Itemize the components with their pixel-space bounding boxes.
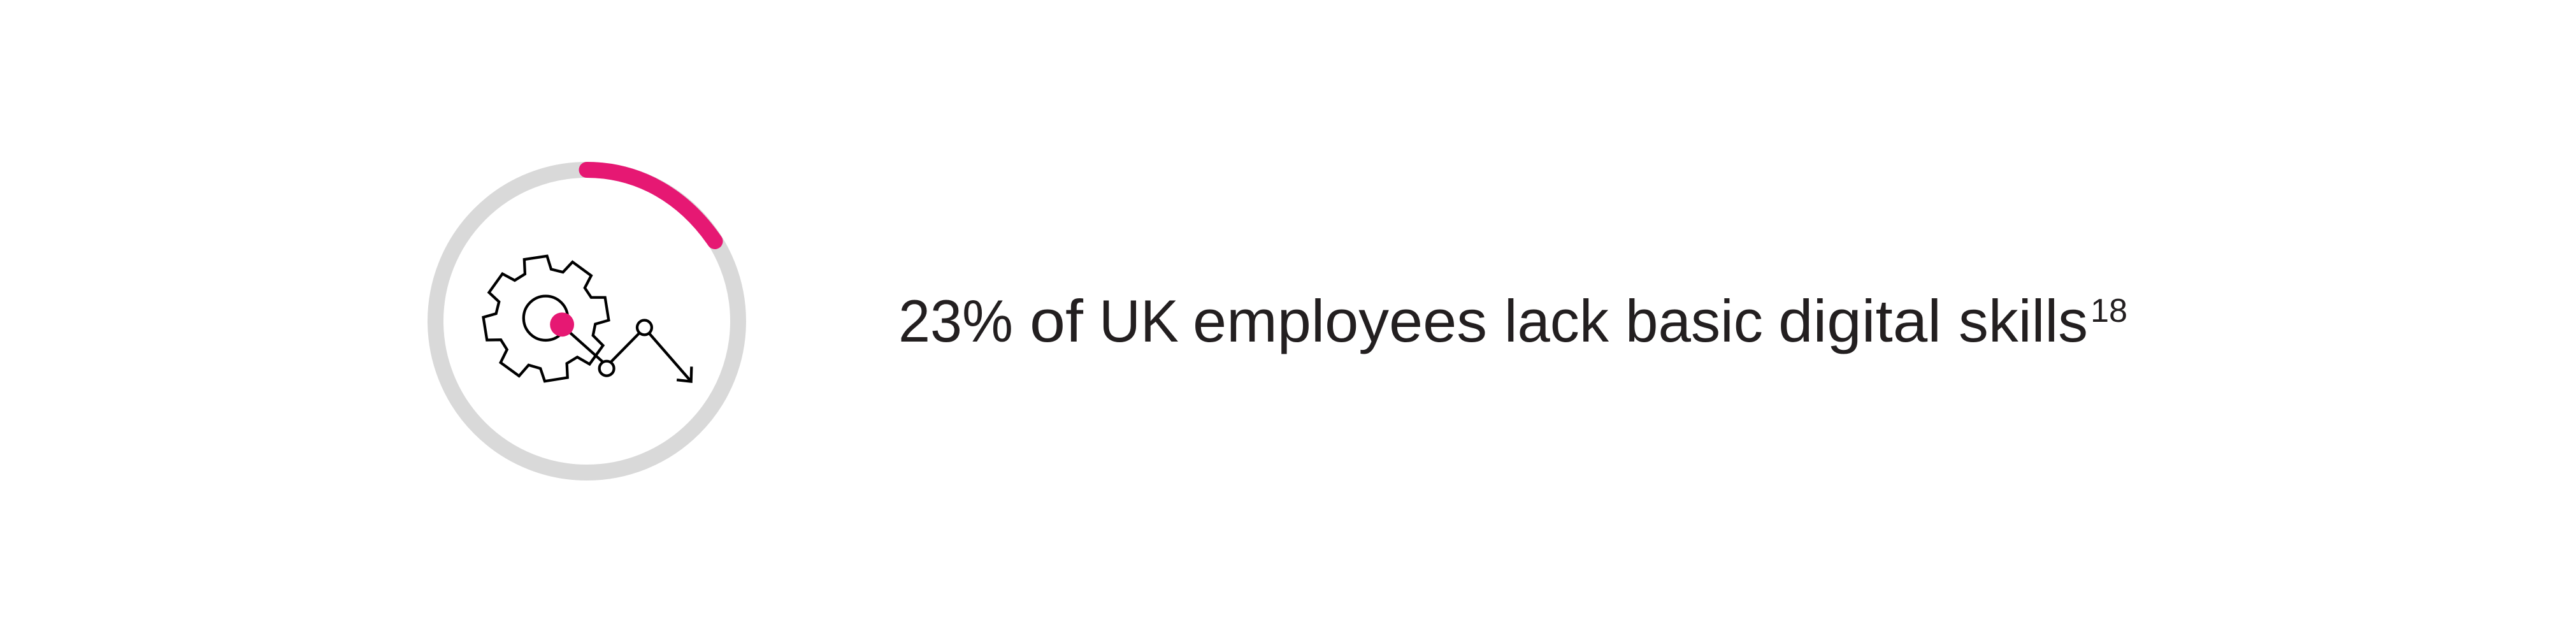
chart node 2 [637, 320, 652, 335]
statement text: UK [1099, 287, 1179, 354]
ring track [436, 170, 738, 473]
gear outline [484, 256, 608, 381]
ring progress arc [587, 170, 715, 241]
chart node 1 [600, 361, 614, 376]
statement text: 23% [898, 287, 1013, 354]
gear hub [524, 296, 568, 340]
footnote reference: 18 [2090, 293, 2127, 329]
icon: gear with declining line chart [484, 256, 691, 382]
statement text: digital [1778, 287, 1941, 354]
chart line with arrow [567, 330, 691, 382]
statement text: of [1030, 287, 1084, 354]
statement text: basic [1625, 287, 1763, 354]
progress ring: 23 percent [436, 170, 738, 473]
statement text [898, 287, 2127, 354]
statement text: employees [1193, 287, 1487, 354]
pink start dot [550, 312, 574, 336]
statement text: lack [1504, 287, 1609, 354]
statement text: skills [1959, 287, 2088, 354]
